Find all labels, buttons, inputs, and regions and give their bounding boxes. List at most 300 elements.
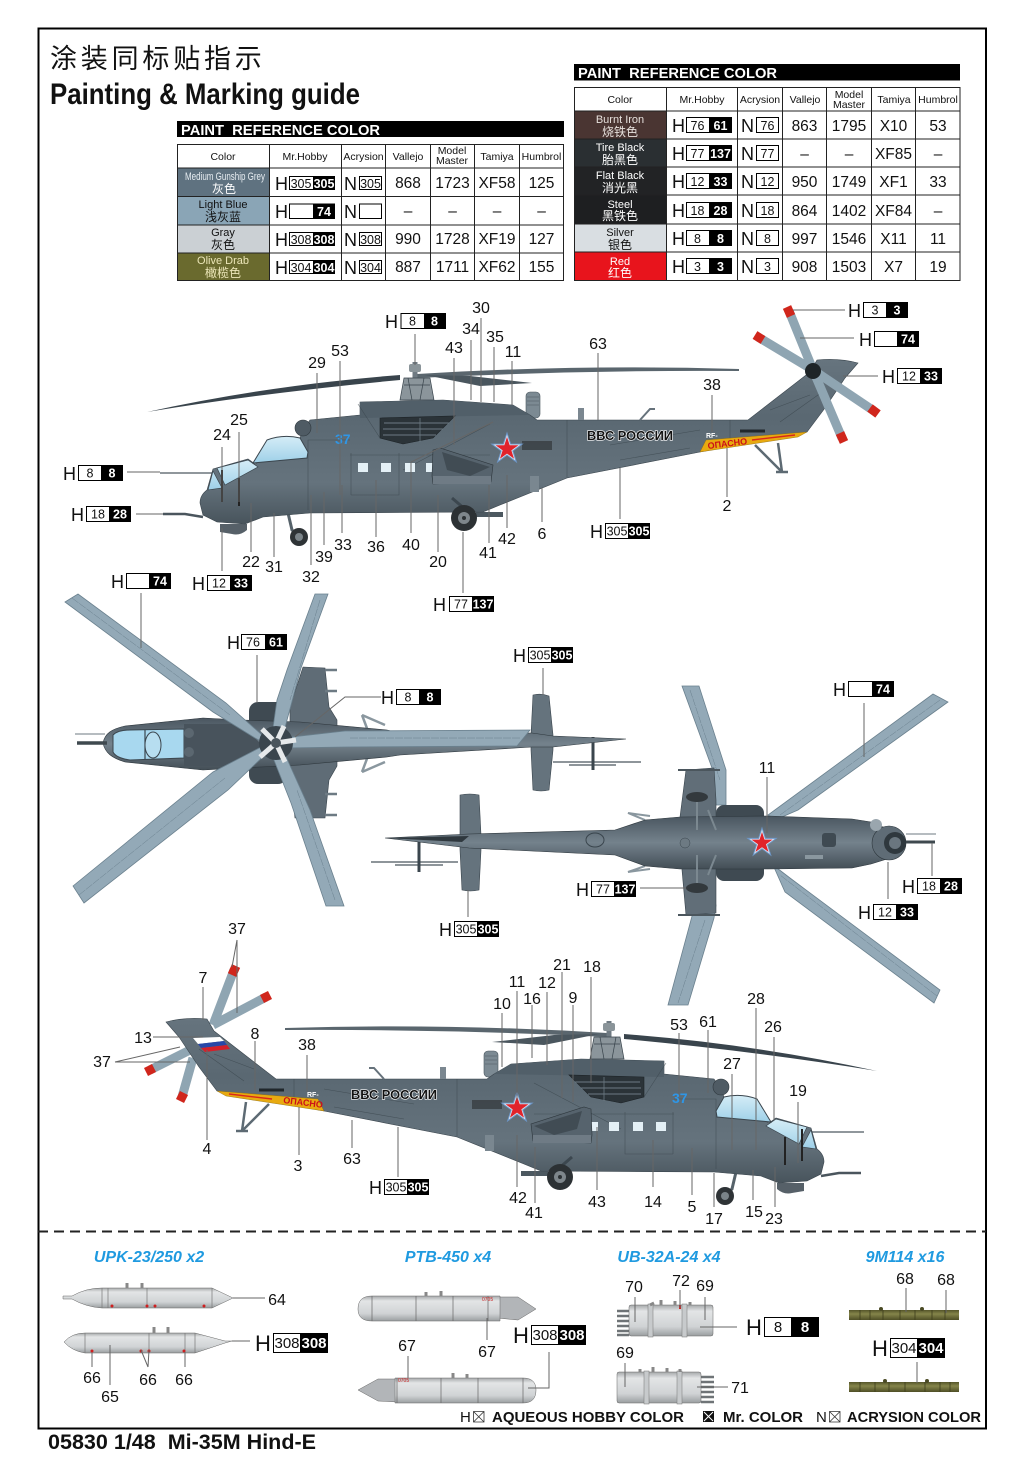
store: UPK-23/250: UPK-23/250 x2 [94, 1249, 204, 1266]
panel: paint table 2: N [741, 201, 754, 221]
legend: H [460, 1409, 471, 1426]
panel: paint table 1: 155 [529, 259, 554, 276]
decal: danger stripe text: ОПАСНО [283, 1095, 323, 1110]
callouts: left side view: 35 [486, 329, 504, 346]
callouts: left side view: 30 [472, 300, 490, 317]
chip H 8 8: 8 [774, 1319, 782, 1336]
chip H 305 305: H [513, 646, 526, 666]
chip H 12 33 tail: 33 [924, 370, 938, 384]
panel: paint table 2: Color [607, 94, 633, 106]
chip H 74 [111, 572, 171, 592]
panel: paint table 2 [574, 64, 960, 281]
panel: paint table 1: 990 [395, 231, 421, 248]
store: UB-32A-24: UB-32A-24 x4 [617, 1249, 721, 1266]
callouts: left side view: 20 [429, 554, 447, 571]
store: PTB-450 [358, 1249, 586, 1403]
store: UPK-23/250: 65 [101, 1389, 119, 1406]
title chinese: 涂装同标贴指示 [50, 37, 266, 76]
panel: paint table 2: – [934, 203, 943, 220]
callouts: top view [141, 593, 573, 737]
panel: paint table 1: XF62 [478, 259, 516, 276]
callouts: left side view: 29 [308, 355, 326, 372]
panel: paint table 2: 28 [714, 204, 727, 218]
chip H 308 308: 308 [532, 1327, 558, 1344]
chip H 77 137 [576, 880, 636, 900]
panel: paint table 2: 黑铁色 [602, 209, 638, 223]
callouts: left side view: 25 [230, 412, 248, 429]
panel: paint table 2: Master [833, 99, 866, 111]
panel: paint table 1: 304 [360, 261, 381, 275]
panel: paint table 2: 33 [714, 175, 727, 189]
chip H 76 61 [227, 633, 287, 653]
callouts: right side view: 37 [228, 921, 246, 938]
chip H 308 308: H [255, 1331, 271, 1356]
helicopter: top view [65, 594, 641, 906]
store: 9M114 [849, 1249, 959, 1392]
chip H 18 28 [71, 505, 131, 525]
decal: RF: RF- [307, 1092, 319, 1099]
chip H 308 308: H [513, 1323, 529, 1348]
panel: paint table 2: Tamiya [877, 94, 911, 106]
panel: paint table 2: H [672, 201, 685, 221]
chip H 12 33 tail [882, 367, 942, 387]
callouts: left side view: 22 [242, 554, 260, 571]
chip H 8 8 [381, 688, 441, 708]
chip H 8 8: 8 [405, 690, 412, 704]
chip H 305 305 [439, 920, 499, 940]
panel: paint table 1: 304 [291, 261, 311, 275]
panel: paint table 1: Model [438, 145, 466, 157]
main rotor blades [65, 594, 530, 906]
chip H 304 304: H [872, 1336, 888, 1361]
panel: paint table 1: – [493, 203, 502, 220]
panel: paint table 1: Vallejo [393, 151, 424, 163]
panel: paint table 2: 1402 [832, 203, 866, 220]
panel: paint table 2: 1546 [832, 231, 866, 248]
panel: paint table 1: N [344, 202, 357, 222]
panel: paint table 1: N [344, 174, 357, 194]
store: UPK-23/250: 66 [175, 1372, 193, 1389]
chip H 3 3: 3 [894, 304, 901, 318]
legend: AQUEOUS HOBBY COLOR [492, 1409, 684, 1426]
chip H 308 308: 308 [301, 1335, 327, 1352]
chip H 8 8: H [385, 312, 398, 332]
panel: paint table 1: 浅灰蓝 [205, 210, 241, 224]
callouts: right side view: 14 [644, 1194, 662, 1211]
store: UB-32A-24: 70 [625, 1279, 643, 1296]
store: PTB-450: 67 [398, 1338, 416, 1355]
panel: paint table 2: 137 [710, 147, 731, 161]
panel: paint table 2: 胎黑色 [602, 153, 638, 167]
panel: paint table 1: Master [436, 155, 469, 167]
legend [460, 1409, 981, 1426]
chip H 304 304 [872, 1336, 945, 1361]
chip H 3 3: H [848, 301, 861, 321]
chip H 305 305: 305 [607, 524, 627, 538]
chip H 77 137: H [576, 880, 589, 900]
footer product title: 05830 1/48 Mi-35M Hind-E [48, 1431, 316, 1454]
callouts: right side view: 38 [298, 1037, 316, 1054]
chip H 308 308 [513, 1323, 586, 1348]
panel: paint table 2: 8 [717, 232, 724, 246]
chip H 305 305: H [590, 522, 603, 542]
callouts: right side view: 17 [705, 1211, 723, 1228]
panel: paint table 2: 烧铁色 [602, 125, 638, 139]
chip H 74 tail [859, 330, 919, 350]
store: UPK-23/250: 64 [268, 1292, 286, 1309]
decal: BBC POCCИИ: ВВС РОССИИ [351, 1087, 437, 1102]
store: 9M114: 68 [896, 1271, 914, 1288]
chip H 305 305: 305 [629, 524, 649, 538]
callouts: right side view: 53 [670, 1017, 688, 1034]
chip H 74: 74 [153, 574, 167, 588]
panel: paint table 2: 红色 [608, 265, 632, 280]
callouts: right side view: 19 [789, 1083, 807, 1100]
legend: N [816, 1409, 827, 1426]
callouts: right side view: 7 [199, 970, 208, 987]
decal: russian flag [193, 1037, 230, 1052]
callouts: right side view: 23 [765, 1211, 783, 1228]
panel: paint table 2: H [672, 257, 685, 277]
panel: paint table 2: Red [610, 256, 630, 268]
callouts: right side view: 8 [251, 1026, 260, 1043]
panel: paint table 1: Light Blue [199, 199, 247, 211]
store: UB-32A-24: 69 [696, 1278, 714, 1295]
tail rotor [755, 307, 878, 442]
chip H 8 8: H [381, 688, 394, 708]
chip H 12 33: 12 [212, 576, 226, 590]
panel: paint table 1: 305 [314, 177, 334, 191]
callouts: right side view: 3 [294, 1158, 303, 1175]
callouts: left side view: 32 [302, 569, 320, 586]
panel: paint table 1: Medium Gunship Grey [185, 171, 265, 183]
chip H 76 61: H [227, 633, 240, 653]
panel: paint table 1: – [448, 203, 457, 220]
panel: paint table 2: 19 [929, 259, 947, 276]
callouts: right side view: 15 [745, 1204, 763, 1221]
callouts: left side view: 24 [213, 427, 231, 444]
store: 9M114: 68 [937, 1272, 955, 1289]
callouts: left side view: 63 [589, 336, 607, 353]
chip H 305 305: 305 [552, 648, 572, 662]
panel: paint table 1: Humbrol [522, 151, 561, 163]
chip H 305 305: 305 [408, 1180, 428, 1194]
callouts: right side view: 16 [523, 991, 541, 1008]
store: UB-32A-24: 72 [672, 1273, 690, 1290]
panel: paint table 1: 308 [360, 233, 381, 247]
chip H 74 tail: 74 [901, 332, 915, 346]
panel: paint table 1: 1723 [435, 175, 470, 192]
chip H 305 305 [369, 1178, 429, 1198]
panel: paint table 2: H [672, 172, 685, 192]
chip H 305 305: H [369, 1178, 382, 1198]
panel: paint table 2: 864 [792, 203, 818, 220]
helicopter: left side view [147, 307, 878, 546]
panel: paint table 1: 305 [360, 177, 381, 191]
chip H 18 28: H [902, 877, 915, 897]
chip H 77 137: H [433, 595, 446, 615]
callouts: left side view: 31 [265, 559, 283, 576]
chip H 8 8 [746, 1315, 819, 1340]
panel: paint table 1 [177, 121, 564, 281]
chip H 18 28: 18 [91, 508, 105, 522]
chip H 8 8 [385, 312, 446, 332]
panel: paint table 2: – [934, 146, 943, 163]
chip H 8 8: 8 [427, 690, 434, 704]
callouts: right side view: 61 [699, 1014, 717, 1031]
chip H 8 8 nose: 8 [87, 466, 94, 480]
chip H 76 61: 76 [246, 636, 260, 650]
panel: paint table 1: – [537, 203, 546, 220]
panel: paint table 2: 1795 [832, 118, 866, 135]
chip H 77 137: 77 [454, 598, 468, 612]
chip H 305 305: 305 [386, 1180, 406, 1194]
panel: paint table 1: XF58 [478, 175, 516, 192]
callouts: underside view: 11 [759, 760, 775, 777]
panel: paint table 2: H [672, 144, 685, 164]
panel: paint table 2: 77 [761, 147, 774, 161]
chip H 12 33: 12 [878, 906, 892, 920]
panel: paint table 1: Tamiya [480, 151, 514, 163]
panel: paint table 1: Olive Drab [197, 255, 249, 267]
panel: paint table 1: Acrysion [343, 151, 384, 163]
panel: paint table 2: 76 [691, 119, 704, 133]
panel: paint table 2: 863 [792, 118, 817, 135]
panel: paint table 1: 125 [529, 175, 554, 192]
panel: paint table 1: 887 [395, 259, 421, 276]
title english: Painting & Marking guide [50, 78, 360, 111]
store: UPK-23/250 [63, 1249, 328, 1406]
store: PTB-450: 0705 [398, 1378, 409, 1384]
panel: paint table 2: N [741, 116, 754, 136]
store: UB-32A-24: 69 [616, 1345, 634, 1362]
chip H 77 137: 137 [473, 598, 493, 612]
panel: paint table 1: Mr.Hobby [283, 151, 328, 163]
chip H 74 [833, 680, 894, 700]
panel: paint table 2: 消光黑 [602, 181, 638, 195]
callouts: right side view: 42 [509, 1190, 527, 1207]
callouts: right side view: 13 [134, 1030, 152, 1047]
panel: paint table 2: 908 [792, 259, 817, 276]
panel: paint table 2: N [741, 257, 754, 277]
chip H 74: 74 [876, 682, 890, 696]
panel: paint table 1: 灰色 [212, 182, 236, 196]
chip H 12 33: 33 [900, 906, 914, 920]
callouts: right side view: 18 [583, 959, 601, 976]
callouts: right side view: 43 [588, 1194, 606, 1211]
panel: paint table 2: X7 [884, 259, 903, 276]
store: PTB-450: PTB-450 x4 [405, 1249, 491, 1266]
callouts: left side view: 39 [315, 549, 333, 566]
callouts: right side view: 28 [747, 991, 765, 1008]
callouts: left side view: 41 [479, 545, 497, 562]
callouts: right side view: 4 [203, 1141, 212, 1158]
panel: paint table 2: PAINT REFERENCE COLOR [578, 65, 777, 82]
callouts: left side view: 42 [498, 531, 516, 548]
panel: paint table 2: Flat Black [596, 170, 645, 182]
callouts: right side view: 41 [525, 1205, 543, 1222]
chip H 18 28: 28 [113, 508, 127, 522]
chip H 305 305: 305 [530, 648, 550, 662]
panel: paint table 1: 304 [314, 261, 334, 275]
chip H 308 308: 308 [274, 1335, 300, 1352]
callouts: right side view: 37 [93, 1054, 111, 1071]
panel: paint table 2: 12 [691, 175, 704, 189]
panel: paint table 2: 1749 [832, 174, 866, 191]
chip H 304 304: 304 [891, 1340, 917, 1357]
callouts: right side view: 12 [538, 975, 556, 992]
chip H 8 8: 8 [801, 1319, 809, 1336]
tail rotor [146, 966, 270, 1101]
panel: paint table 2: N [741, 144, 754, 164]
panel: paint table 1: PAINT REFERENCE COLOR [181, 122, 380, 139]
callouts: right side view: 11 [509, 974, 525, 991]
panel: paint table 1: 305 [291, 177, 311, 191]
chip H 305 305 [513, 646, 573, 666]
chip H 3 3: 3 [872, 304, 879, 318]
callouts: left side view: 34 [462, 321, 480, 338]
callouts: left side view: 2 [723, 498, 732, 515]
chip H 12 33: 33 [234, 576, 248, 590]
panel: paint table 1: XF19 [478, 231, 516, 248]
panel: paint table 1: – [404, 203, 413, 220]
panel: paint table 2: 950 [792, 174, 818, 191]
callouts: left side view: 40 [402, 537, 420, 554]
panel: paint table 2: 33 [929, 174, 947, 191]
panel: paint table 1: Color [210, 151, 236, 163]
helicopter: underside view [371, 686, 948, 1005]
decal: RF: RF- [706, 433, 718, 440]
store: UB-32A-24 [616, 1249, 819, 1404]
store: PTB-450: 67 [478, 1344, 496, 1361]
callouts: left side view: 33 [334, 537, 352, 554]
chip H 18 28: 18 [922, 880, 936, 894]
panel: paint table 2: Silver [606, 227, 634, 239]
panel: paint table 2: 53 [929, 118, 947, 135]
chip H 74: H [833, 680, 846, 700]
chip H 8 8 nose: H [63, 464, 76, 484]
callouts: right side view: 26 [764, 1019, 782, 1036]
panel: paint table 2: XF1 [879, 174, 908, 191]
chip H 305 305: 305 [456, 922, 476, 936]
chip H 12 33 tail: 12 [902, 370, 916, 384]
callouts: right side view: 9 [569, 990, 578, 1007]
callouts: right side view: 10 [493, 996, 511, 1013]
panel: paint table 1: 橄榄色 [205, 265, 241, 280]
helicopter: right side view [146, 966, 877, 1205]
callouts: right side view: 63 [343, 1151, 361, 1168]
main rotor blades [668, 686, 948, 1005]
panel: paint table 1: N [344, 230, 357, 250]
chip H 12 33 [858, 903, 918, 923]
panel: paint table 2: 77 [691, 147, 704, 161]
panel: paint table 2: – [845, 146, 854, 163]
chip H 8 8: 8 [431, 314, 438, 328]
callouts: left side view: 36 [367, 539, 385, 556]
panel: paint table 2: H [672, 229, 685, 249]
callouts: left side view: 53 [331, 343, 349, 360]
panel: paint table 2: 银色 [608, 238, 632, 252]
panel: paint table 2: X11 [880, 231, 907, 248]
panel: paint table 2: 18 [691, 204, 704, 218]
callouts: left side view: 43 [445, 340, 463, 357]
callouts: left side view: 38 [703, 377, 721, 394]
chip H 76 61: 61 [269, 636, 283, 650]
panel: paint table 2: 3 [764, 260, 771, 274]
callouts: left side view: 6 [538, 526, 547, 543]
chip H 8 8 nose: 8 [109, 466, 116, 480]
panel: paint table 1: 308 [314, 233, 334, 247]
panel: paint table 2: Burnt Iron [596, 114, 644, 126]
chip H 308 308 [255, 1331, 328, 1356]
chip H 12 33 tail: H [882, 367, 895, 387]
panel: paint table 2: 1503 [832, 259, 866, 276]
panel: paint table 1: H [275, 258, 288, 278]
panel: paint table 2: XF85 [875, 146, 912, 163]
decal: 37: 37 [335, 431, 351, 447]
panel: paint table 2: Model [835, 89, 863, 101]
store: PTB-450: 0705 [482, 1297, 493, 1303]
panel: paint table 2: 12 [761, 175, 774, 189]
panel: paint table 1: 308 [291, 233, 311, 247]
chip H 74: H [111, 572, 124, 592]
legend: ACRYSION COLOR [847, 1409, 981, 1426]
chip H 18 28 [902, 877, 962, 897]
store: UPK-23/250: 66 [139, 1372, 157, 1389]
panel: paint table 1: H [275, 174, 288, 194]
panel: paint table 2: Tire Black [596, 142, 645, 154]
panel: paint table 2: 3 [694, 260, 701, 274]
chip H 77 137: 77 [596, 882, 610, 896]
chip H 12 33 [192, 574, 252, 594]
panel: paint table 1: 灰色 [211, 238, 235, 252]
panel: paint table 2: X10 [880, 118, 908, 135]
store: 9M114: 9M114 x16 [866, 1249, 945, 1266]
chip H 305 305 [590, 522, 650, 542]
panel: paint table 1: H [275, 202, 288, 222]
panel: paint table 2: 8 [764, 232, 771, 246]
chip H 12 33: H [192, 574, 205, 594]
store: UPK-23/250: 66 [83, 1370, 101, 1387]
panel: paint table 1: 1711 [436, 259, 469, 276]
panel: paint table 2: 8 [694, 232, 701, 246]
panel: paint table 1: N [344, 258, 357, 278]
panel: paint table 2: Acrysion [740, 94, 780, 106]
chip H 77 137 [433, 595, 494, 615]
callouts: left side view [63, 300, 942, 615]
panel: paint table 2: Humbrol [918, 94, 958, 106]
decal: BBC POCCИИ: ВВС РОССИИ [587, 428, 673, 443]
panel: paint table 2: 76 [761, 119, 774, 133]
chip H 18 28: H [71, 505, 84, 525]
panel: paint table 2: N [741, 172, 754, 192]
panel: paint table 1: 1728 [435, 231, 470, 248]
chip H 3 3 [848, 301, 908, 321]
panel: paint table 2: Mr.Hobby [680, 94, 725, 106]
panel: paint table 2: H [672, 116, 685, 136]
callouts: right side view [93, 921, 807, 1228]
panel: paint table 2: – [800, 146, 809, 163]
panel: paint table 2: N [741, 229, 754, 249]
callouts: right side view: 21 [553, 957, 571, 974]
rotor hub [259, 726, 296, 762]
panel: paint table 2: Steel [607, 199, 633, 211]
panel: paint table 2: Vallejo [790, 94, 821, 106]
chip H 308 308: 308 [559, 1327, 585, 1344]
chip H 305 305: H [439, 920, 452, 940]
callouts: left side view: 11 [505, 344, 521, 361]
callouts: right side view: 27 [723, 1056, 741, 1073]
